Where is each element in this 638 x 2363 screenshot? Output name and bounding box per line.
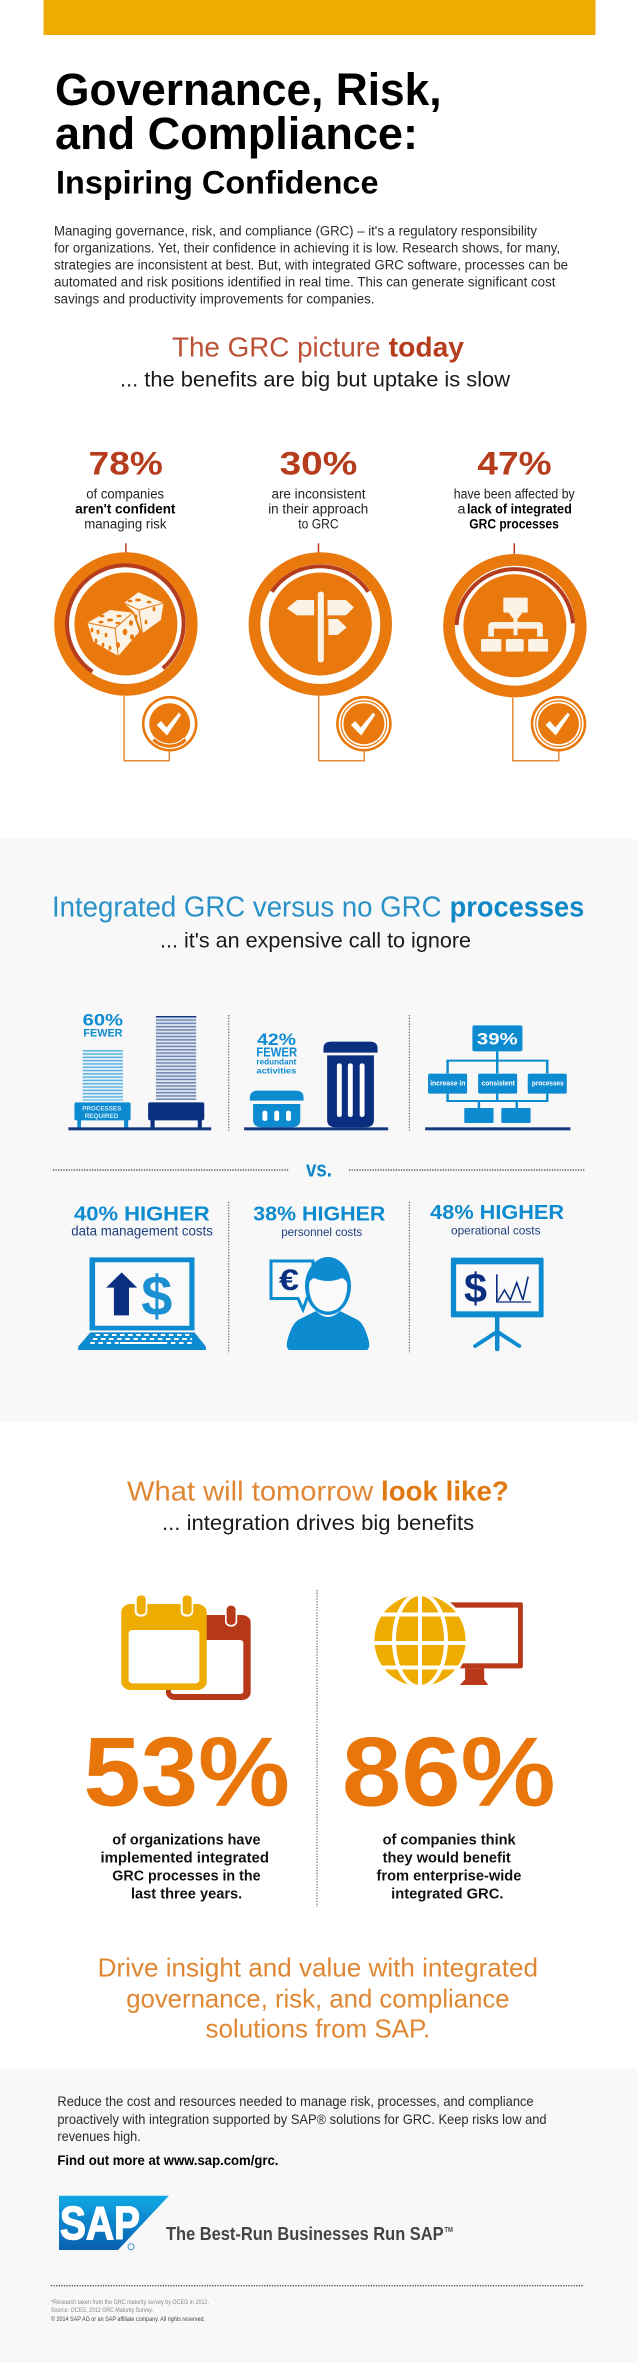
- intro paragraph: for organizations. Yet, their confidence in achieving it is low. Research shows, for many,: [54, 241, 560, 256]
- dividers: [229, 1015, 409, 1353]
- stat 47%: 47%: [477, 445, 552, 481]
- caption: of companies think: [383, 1832, 517, 1848]
- heading: integrated GRC versus no GRC: ... it's an expensive call to ignore: [160, 929, 471, 952]
- caption: from enterprise-wide: [376, 1869, 521, 1885]
- org chart labels: [430, 1029, 564, 1088]
- heading: integrated GRC versus no GRC: Integrated GRC versus no GRC: [52, 892, 442, 924]
- stat caption: to GRC: [298, 517, 339, 532]
- panel: footer: [0, 2068, 638, 2363]
- title: [55, 64, 442, 200]
- 42% fewer label: 42%: [257, 1030, 296, 1049]
- stat column: 30%: [249, 445, 392, 761]
- 60% fewer label: [83, 1011, 123, 1040]
- icon: small check badge: [513, 696, 586, 761]
- chart: 39% increase in consistent processes org chart: [425, 1025, 570, 1130]
- intro paragraph: strategies are inconsistent at best. But, with integrated GRC software, processes can be: [54, 258, 568, 273]
- call to action: Drive insight and value with integrated: [98, 1953, 538, 1983]
- icon: calendars: [121, 1593, 251, 1700]
- org chart labels: processes: [532, 1079, 564, 1088]
- heading: the GRC picture today: ... the benefits are big but uptake is slow: [120, 369, 511, 392]
- caption: GRC processes in the: [112, 1869, 260, 1885]
- tagline: The Best-Run Businesses Run SAP: [166, 2224, 444, 2244]
- top yellow banner: [44, 0, 596, 35]
- cost column: 40% higher data management: [71, 1204, 213, 1350]
- stat caption: lack of integrated: [467, 502, 572, 517]
- stat column: 47%: [443, 445, 587, 761]
- icon: globe and monitor: [374, 1594, 523, 1686]
- stat caption: in their approach: [268, 502, 368, 517]
- fine print: [51, 2300, 209, 2323]
- intro paragraph: savings and productivity improvements for companies.: [54, 292, 374, 307]
- processes required label: PROCESSES: [82, 1106, 122, 1113]
- caption: operational costs: [451, 1223, 540, 1237]
- intro paragraph: automated and risk positions identified in real time. This can generate significant cost: [54, 275, 556, 290]
- call to action: governance, risk, and compliance: [126, 1983, 510, 2013]
- heading: what will tomorrow look like: What will tomorrow: [127, 1476, 374, 1507]
- org chart labels: 39%: [477, 1029, 518, 1048]
- icon: org chart in circle: [443, 543, 587, 697]
- stat caption: managing risk: [84, 517, 167, 532]
- icon: presentation board with dollar chart: $: [464, 1264, 487, 1312]
- stat caption: [454, 487, 575, 532]
- stat: 53%: [83, 1717, 290, 1902]
- heading: the GRC picture today: [120, 332, 511, 392]
- divider: [51, 2285, 584, 2287]
- icon: signpost in circle: [249, 543, 392, 696]
- call to action: [98, 1953, 538, 2044]
- stat 48% higher: 48% HIGHER: [430, 1202, 565, 1224]
- find out more link text: Find out more at www.sap.com/grc.: [57, 2152, 278, 2168]
- stat column: 78%: [54, 445, 198, 761]
- chart: 60% fewer processes stacks: [68, 1011, 211, 1130]
- panel: integrated GRC versus no GRC: [0, 839, 638, 1422]
- icon: small check badge: [319, 696, 392, 761]
- title: Governance, Risk,: [55, 64, 442, 115]
- icon: laptop with rising dollar: [78, 1257, 206, 1350]
- processes required label: [82, 1106, 122, 1120]
- stat 38% higher: 38% HIGHER: [253, 1204, 386, 1226]
- cost column: 38% higher personnel: [253, 1204, 386, 1350]
- stat: 86%: 86%: [342, 1717, 556, 1827]
- caption: they would benefit: [383, 1850, 511, 1866]
- 42% fewer label: redundant: [256, 1056, 296, 1066]
- divider: [316, 1590, 318, 1907]
- stat caption: [75, 487, 176, 532]
- heading: what will tomorrow look like: [127, 1476, 509, 1535]
- footer paragraph: Reduce the cost and resources needed to manage risk, processes, and compliance: [57, 2093, 534, 2109]
- fine print: *Research taken from the GRC maturity survey by OCEG in 2012.: [51, 2300, 209, 2306]
- caption: [376, 1832, 521, 1902]
- org chart labels: consistent: [482, 1079, 515, 1088]
- footer paragraph: revenues high.: [57, 2128, 141, 2144]
- caption: personnel costs: [281, 1225, 362, 1239]
- stat: 86%: [342, 1717, 556, 1902]
- caption: of organizations have: [112, 1832, 260, 1848]
- stat caption: are inconsistent: [272, 487, 366, 502]
- footer paragraph: proactively with integration supported by SAP® solutions for GRC. Keep risks low and: [57, 2111, 547, 2127]
- stat 40% higher: 40% HIGHER: [74, 1204, 210, 1226]
- heading: the GRC picture today: today: [389, 332, 464, 363]
- stat caption: have been affected by: [454, 487, 575, 502]
- stat 30%: 30%: [280, 445, 357, 481]
- icon: presentation board with dollar chart: [451, 1258, 544, 1349]
- caption: [100, 1832, 269, 1902]
- icon: person with euro speech bubble: €: [279, 1264, 299, 1297]
- stat caption: of companies: [86, 487, 164, 502]
- call to action: solutions from SAP.: [206, 2014, 430, 2044]
- stat 78%: 78%: [89, 445, 163, 481]
- SAP logo: SAP: [60, 2197, 140, 2249]
- stat caption: [268, 487, 368, 532]
- org chart labels: increase in: [430, 1079, 466, 1088]
- stat: 53%: 53%: [83, 1717, 290, 1827]
- heading: what will tomorrow look like: ... integration drives big benefits: [162, 1512, 474, 1535]
- 60% fewer label: FEWER: [83, 1028, 123, 1040]
- heading: the GRC picture today: The GRC picture: [172, 332, 380, 363]
- intro paragraph: [54, 224, 568, 307]
- stat caption: GRC processes: [469, 517, 559, 532]
- fine print: © 2014 SAP AG or an SAP affiliate company. All rights reserved.: [51, 2316, 205, 2323]
- title: and Compliance:: [55, 108, 418, 159]
- icon: person with euro speech bubble: [271, 1257, 369, 1350]
- 42% fewer label: activities: [256, 1065, 297, 1075]
- intro paragraph: Managing governance, risk, and compliance (GRC) – it's a regulatory responsibility: [54, 224, 537, 239]
- 60% fewer label: 60%: [83, 1011, 123, 1030]
- cost column: 48% higher operational: [430, 1202, 565, 1349]
- chart: 42% fewer redundant activities bins: [244, 1030, 388, 1130]
- 42% fewer label: [256, 1030, 298, 1075]
- caption: data management costs: [71, 1224, 213, 1239]
- tagline: TM: [444, 2227, 453, 2234]
- fine print: Source: OCEG, 2012 GRC Maturity Survey.: [51, 2308, 153, 2314]
- processes required label: REQUIRED: [85, 1113, 119, 1120]
- title: Inspiring Confidence: [56, 164, 378, 200]
- icon: small check badge: [124, 696, 198, 761]
- caption: implemented integrated: [100, 1850, 269, 1866]
- caption: integrated GRC.: [391, 1886, 504, 1902]
- caption: last three years.: [131, 1886, 242, 1902]
- icon: laptop with rising dollar: $: [141, 1264, 172, 1328]
- heading: integrated GRC versus no GRC: [52, 892, 584, 952]
- footer paragraph: [57, 2093, 547, 2144]
- 42% fewer label: FEWER: [256, 1045, 298, 1060]
- stat caption: a: [458, 502, 466, 517]
- stat caption: aren't confident: [75, 502, 176, 517]
- icon: dice in circle: [54, 543, 198, 696]
- heading: integrated GRC versus no GRC: processes: [450, 892, 584, 924]
- heading: what will tomorrow look like: look like?: [381, 1476, 509, 1507]
- vs divider: vs.: [306, 1157, 332, 1182]
